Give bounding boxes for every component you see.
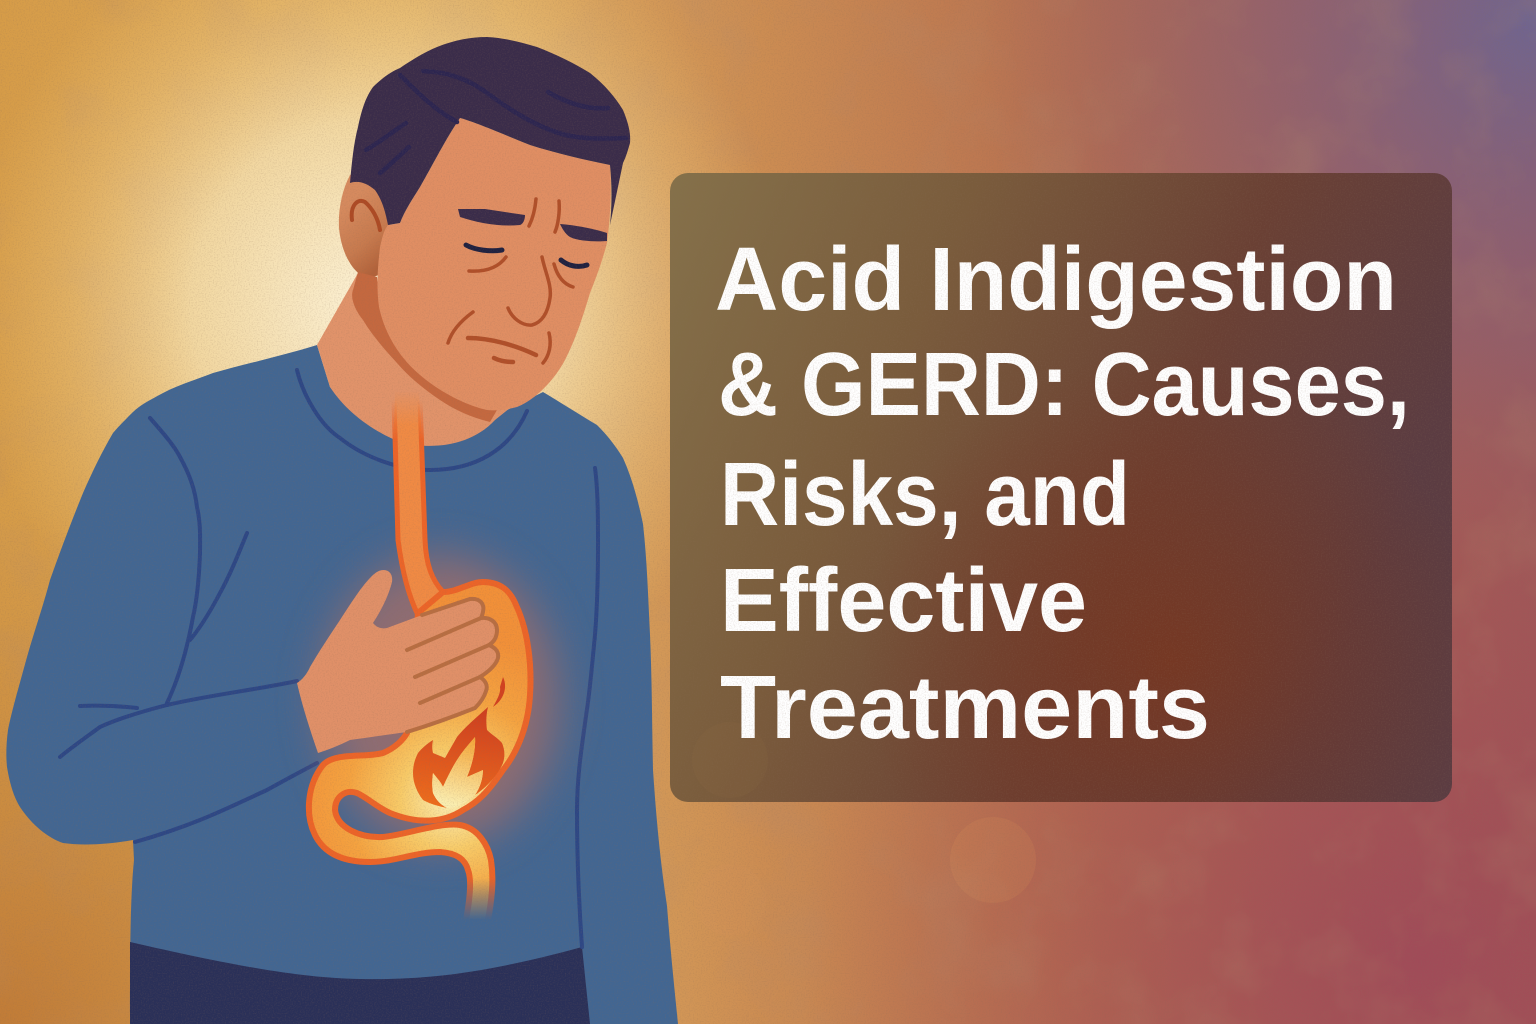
jaw shadow: [352, 272, 497, 422]
stomach: [309, 582, 530, 925]
pants: [130, 942, 590, 1024]
hair: [350, 37, 630, 225]
esophagus: [394, 392, 445, 615]
closed eyes: [466, 245, 587, 266]
title text: Treatments: [720, 658, 1210, 758]
knuckle and finger lines: [407, 599, 498, 732]
title panel: [670, 173, 1452, 802]
face: [377, 118, 611, 410]
sweater: [6, 345, 678, 1024]
stomach glow: [322, 555, 558, 845]
title text: [715, 230, 1410, 758]
face wrinkles: [448, 199, 573, 363]
eyebrows: [458, 209, 607, 241]
hand: [297, 570, 498, 753]
hair strand lines: [366, 71, 626, 173]
title text: & GERD: Causes,: [718, 335, 1410, 435]
title text: Risks, and: [720, 445, 1130, 545]
ear: [339, 170, 395, 277]
inner ear line: [352, 201, 380, 230]
man with heartburn illustration: [6, 37, 678, 1024]
title text: Acid Indigestion: [715, 230, 1397, 330]
title text: Effective: [720, 551, 1087, 651]
flame: [413, 677, 505, 808]
neck: [317, 273, 520, 446]
sweater fold lines: [60, 370, 598, 947]
